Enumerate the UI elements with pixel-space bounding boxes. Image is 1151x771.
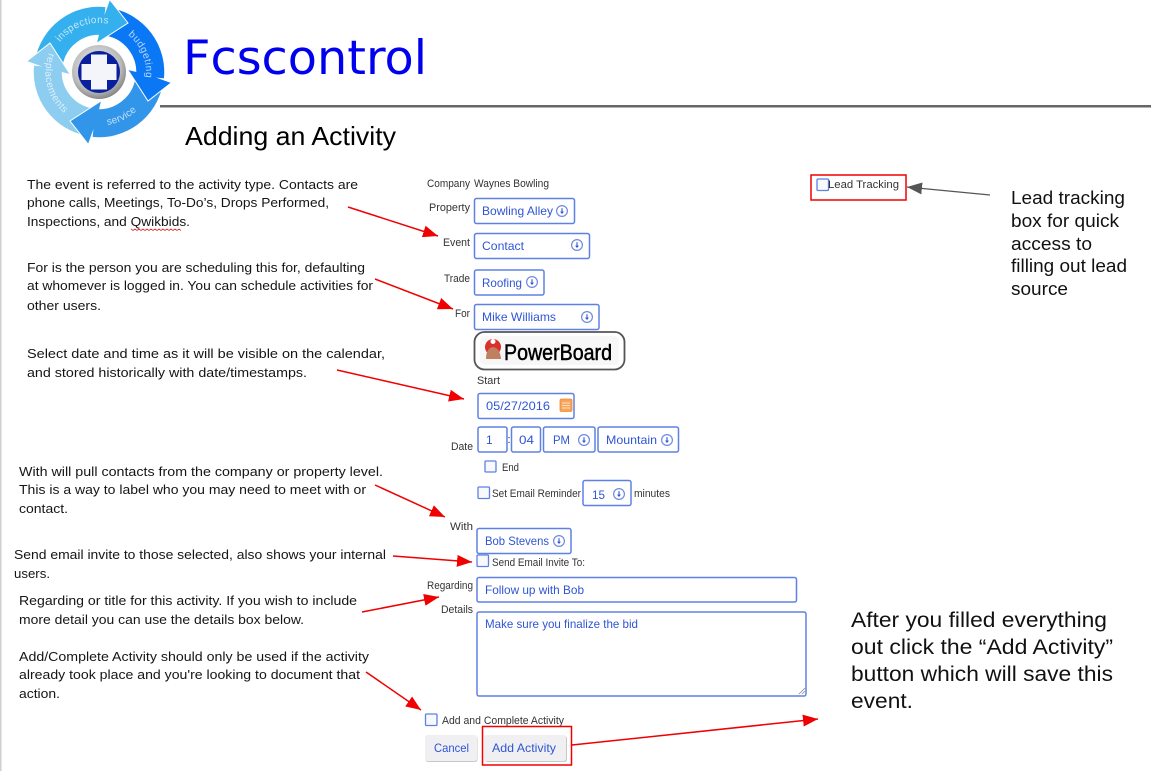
text block: for explanation: at whomever is logged in. You can schedule activities for <box>27 278 374 293</box>
text block: event explanation <box>27 177 358 230</box>
event field <box>443 234 590 258</box>
arrow: event <box>348 207 438 236</box>
time fields: : <box>508 434 511 446</box>
start label: Start <box>477 375 500 387</box>
for field: For <box>455 308 470 320</box>
text block: regarding explanation: more detail you can use the details box below. <box>19 612 304 627</box>
text block: with explanation: With will pull contacts from the company or property level. <box>19 464 383 479</box>
property field <box>429 198 574 224</box>
panel: activity form <box>425 178 806 762</box>
text block: add/complete explanation: action. <box>19 686 60 701</box>
trade field <box>444 270 544 295</box>
with field: With <box>450 521 473 533</box>
text block: for explanation <box>27 260 374 313</box>
text block: for explanation: other users. <box>27 298 101 313</box>
text block: regarding explanation <box>19 593 357 627</box>
text block: add activity callout: After you filled everything <box>851 609 1107 632</box>
add and complete checkbox: Add and Complete Activity <box>442 715 564 727</box>
text block: event explanation: phone calls, Meetings, To-Do’s, Drops Performed, <box>27 195 329 210</box>
add activity button <box>484 735 567 762</box>
arrow: email invite <box>393 556 472 562</box>
heading: Adding an Activity <box>185 121 396 151</box>
arrow: lead tracking <box>907 187 990 195</box>
icon: Fcscontrol circular logo: inspections <box>54 16 108 42</box>
time fields <box>451 427 678 453</box>
with field <box>450 521 571 554</box>
text block: add/complete explanation: already took place and you're looking to document that <box>19 667 360 682</box>
text block: lead tracking callout <box>1011 188 1127 299</box>
text block: lead tracking callout: source <box>1011 279 1068 299</box>
text block: add activity callout <box>851 609 1113 713</box>
time fields: PM <box>553 433 570 447</box>
text block: date and time explanation: Select date and time as it will be visible on the calendar, <box>27 346 385 361</box>
email reminder <box>478 480 670 506</box>
company row: Company <box>427 178 470 190</box>
text block: date and time explanation <box>27 346 385 380</box>
text block: lead tracking callout: Lead tracking <box>1011 188 1125 208</box>
text block: date and time explanation: and stored historically with date/timestamps. <box>27 365 307 380</box>
icon: Fcscontrol circular logo: service <box>107 108 136 125</box>
title: Fcscontrol <box>183 31 427 86</box>
event field: Contact <box>482 239 525 253</box>
regarding field <box>427 578 796 602</box>
arrow: regarding <box>362 597 439 612</box>
text block: add activity callout: out click the “Add Activity” <box>851 636 1113 659</box>
panel: lead tracking checkbox: Lead Tracking <box>828 179 899 191</box>
text block: lead tracking callout: filling out lead <box>1011 256 1127 276</box>
text block: add activity callout: event. <box>851 690 913 713</box>
trade field: Trade <box>444 273 470 285</box>
text block: event explanation: Inspections, and Qwikbids. <box>27 214 190 229</box>
details field: Make sure you finalize the bid <box>485 617 638 631</box>
regarding field: Regarding <box>427 580 473 592</box>
start date field: 05/27/2016 <box>486 399 550 413</box>
company row: Waynes Bowling <box>474 178 549 190</box>
text block: lead tracking callout: box for quick <box>1011 211 1120 231</box>
start date field <box>478 394 574 418</box>
text block: with explanation <box>19 464 383 516</box>
text block: with explanation: contact. <box>19 501 68 516</box>
text block: add/complete explanation: Add/Complete Activity should only be used if the activity <box>19 649 370 664</box>
details field: Details <box>441 604 473 616</box>
text block: with explanation: This is a way to label who you may need to meet with or <box>19 482 367 497</box>
text block: email invite explanation: users. <box>14 566 50 581</box>
text block: email invite explanation <box>14 547 386 581</box>
with field: Bob Stevens <box>485 534 549 548</box>
send email invite checkbox: Send Email Invite To: <box>492 557 585 569</box>
cancel button <box>425 735 478 762</box>
arrow: with <box>375 485 445 517</box>
text block: lead tracking callout: access to <box>1011 234 1092 254</box>
trade field: Roofing <box>482 276 522 290</box>
time fields: 04 <box>519 433 534 447</box>
cancel button: Cancel <box>434 741 469 755</box>
email reminder: Set Email Reminder <box>492 488 581 500</box>
highlight: add activity button <box>482 726 572 765</box>
panel: lead tracking checkbox <box>811 175 906 200</box>
end checkbox <box>485 461 519 474</box>
text block: event explanation: The event is referred to the activity type. Contacts are <box>27 177 358 192</box>
text block: add activity callout: button which will save this <box>851 663 1113 686</box>
for field <box>455 304 599 330</box>
arrow: add activity <box>572 719 818 745</box>
company row <box>427 178 549 190</box>
time fields: Date <box>451 441 473 453</box>
text block: for explanation: For is the person you are scheduling this for, defaulting <box>27 260 365 275</box>
PowerBoard button: PowerBoard <box>504 340 612 365</box>
text block: regarding explanation: Regarding or title for this activity. If you wish to include <box>19 593 357 608</box>
time fields: Mountain <box>606 433 657 447</box>
send email invite checkbox <box>477 555 585 569</box>
regarding field: Follow up with Bob <box>485 583 584 597</box>
email reminder: 15 <box>592 488 605 502</box>
arrow: add and complete <box>366 672 421 710</box>
property field: Bowling Alley <box>482 204 553 218</box>
icon: Fcscontrol circular logo: budgeting <box>128 30 152 78</box>
icon: Fcscontrol circular logo: replacements <box>44 54 67 112</box>
header rule <box>160 105 1151 108</box>
details field <box>441 604 806 696</box>
arrow: date <box>337 370 464 399</box>
PowerBoard button <box>474 332 624 370</box>
text block: add/complete explanation <box>19 649 370 701</box>
property field: Property <box>429 202 470 214</box>
add activity button: Add Activity <box>492 741 556 755</box>
event field: Event <box>443 237 470 249</box>
icon: Fcscontrol circular logo <box>27 0 171 144</box>
arrow: for <box>375 279 453 309</box>
text block: email invite explanation: Send email invite to those selected, also shows your internal <box>14 547 386 562</box>
time fields: 1 <box>486 433 493 447</box>
email reminder: minutes <box>634 488 670 500</box>
end checkbox: End <box>502 462 519 474</box>
for field: Mike Williams <box>482 310 556 324</box>
